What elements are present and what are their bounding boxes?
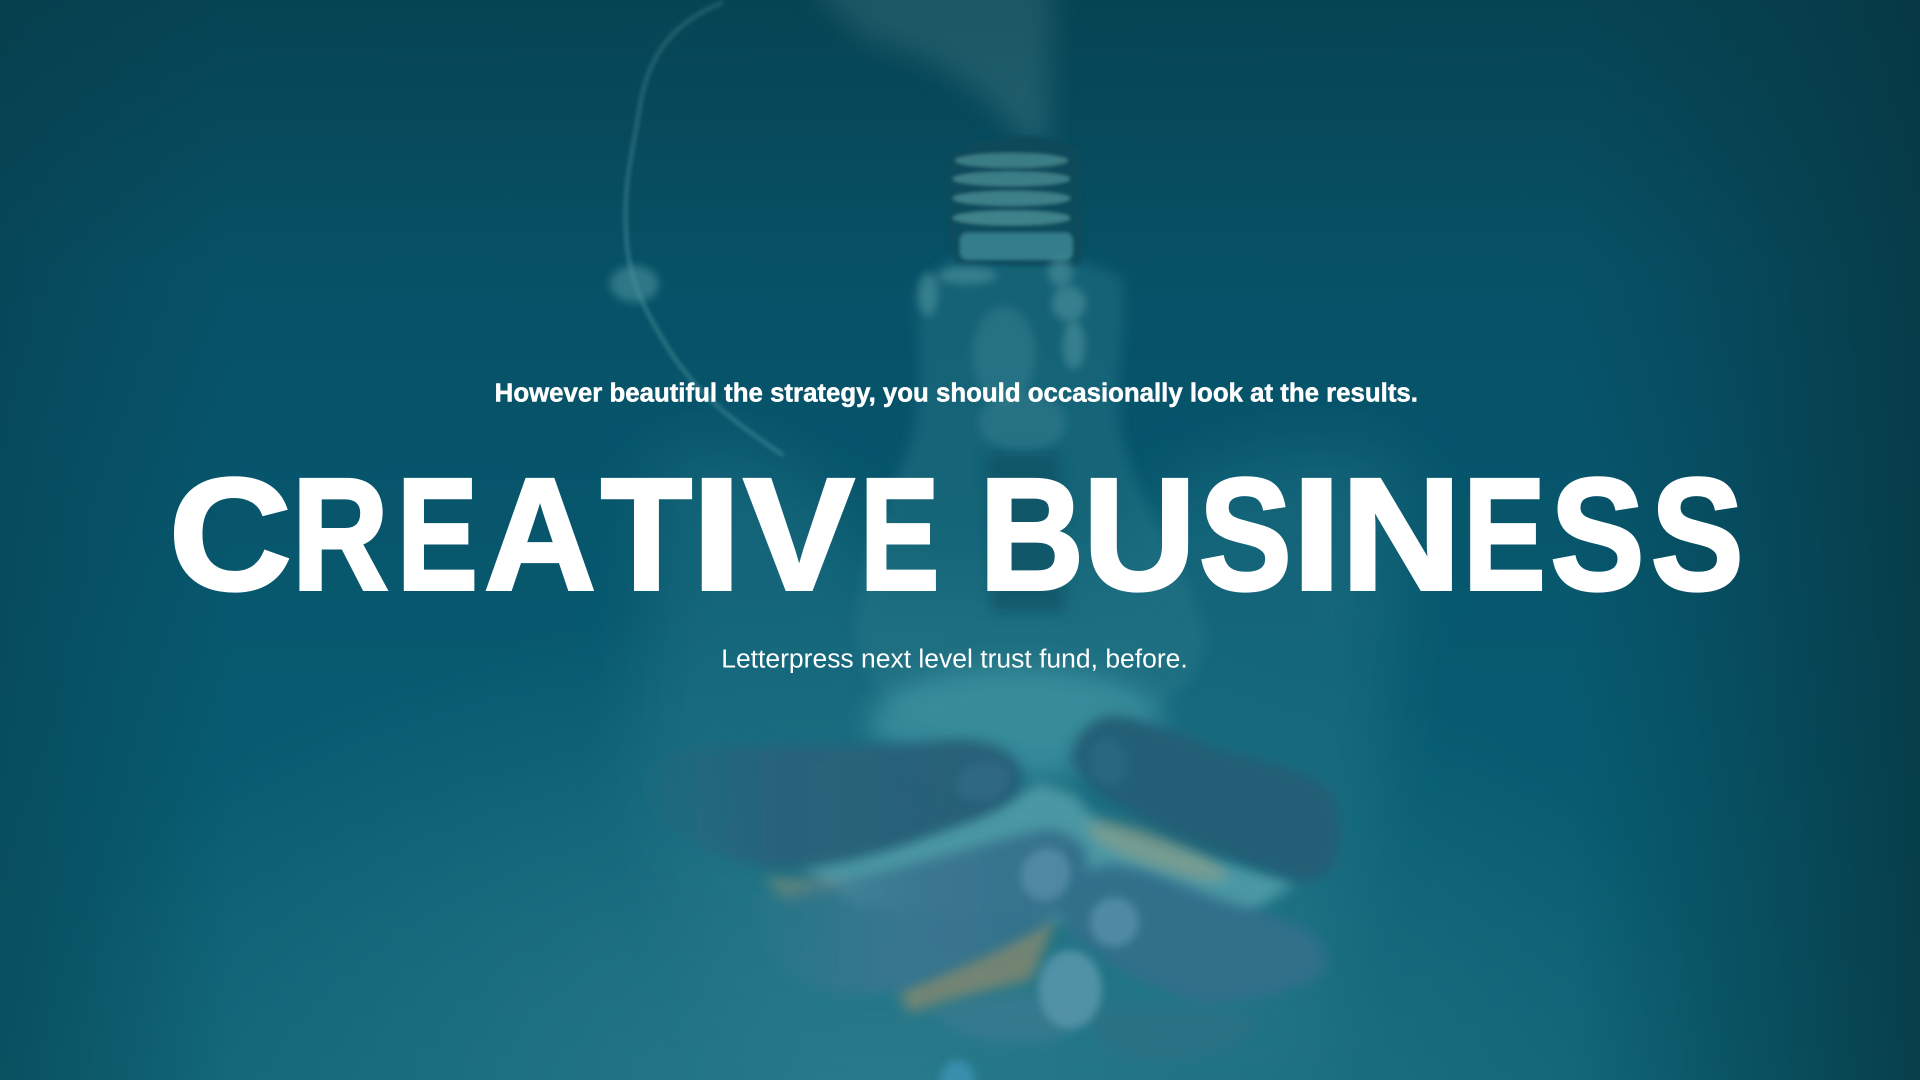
- title: T: [601, 445, 692, 623]
- right upper finger: [1070, 715, 1341, 882]
- title: R: [292, 445, 388, 623]
- title: I: [692, 445, 741, 623]
- photo: hands silhouette glow: [637, 448, 1399, 1080]
- photo: blue spot at bottom edge: [940, 1060, 975, 1080]
- title: V: [744, 445, 854, 623]
- right lower finger: [1059, 864, 1324, 1003]
- title: I: [1292, 445, 1341, 623]
- photo: hanging cord and bead: [610, 2, 784, 456]
- bulb glass: [857, 260, 1206, 741]
- title: B: [979, 445, 1084, 623]
- title: N: [1341, 445, 1461, 623]
- photo: fingers: [642, 715, 1341, 1060]
- title: S: [1199, 445, 1292, 623]
- title: C: [169, 445, 291, 623]
- lower knuckle: [1092, 1004, 1261, 1060]
- title: A: [484, 445, 596, 623]
- title: U: [1083, 445, 1196, 623]
- bulb screw neck: [945, 136, 1085, 267]
- tagline: However beautiful the strategy, you should occasionally look at the results.: [495, 380, 1418, 408]
- bulb highlights: [918, 257, 1086, 452]
- title: E: [1463, 445, 1545, 623]
- bulb base glow: [869, 667, 1163, 778]
- photo: warm sliver below the thumb: [899, 916, 1057, 1013]
- title: S: [1651, 445, 1743, 623]
- left upper finger: [642, 739, 1022, 869]
- bottom finger: [931, 989, 1073, 1043]
- photo: fingernails: [952, 734, 1139, 1029]
- photo: light bulb: [857, 136, 1206, 778]
- title: S: [1551, 445, 1644, 623]
- title: E: [397, 445, 478, 623]
- title: E: [860, 445, 939, 623]
- light beam behind bulb: [802, 0, 1053, 153]
- subtitle: Letterpress next level trust fund, before.: [721, 645, 1188, 673]
- left lower finger: [755, 829, 1088, 993]
- photo: lit centre between the hands: [764, 784, 1298, 931]
- bulb filament dark core: [986, 453, 1065, 612]
